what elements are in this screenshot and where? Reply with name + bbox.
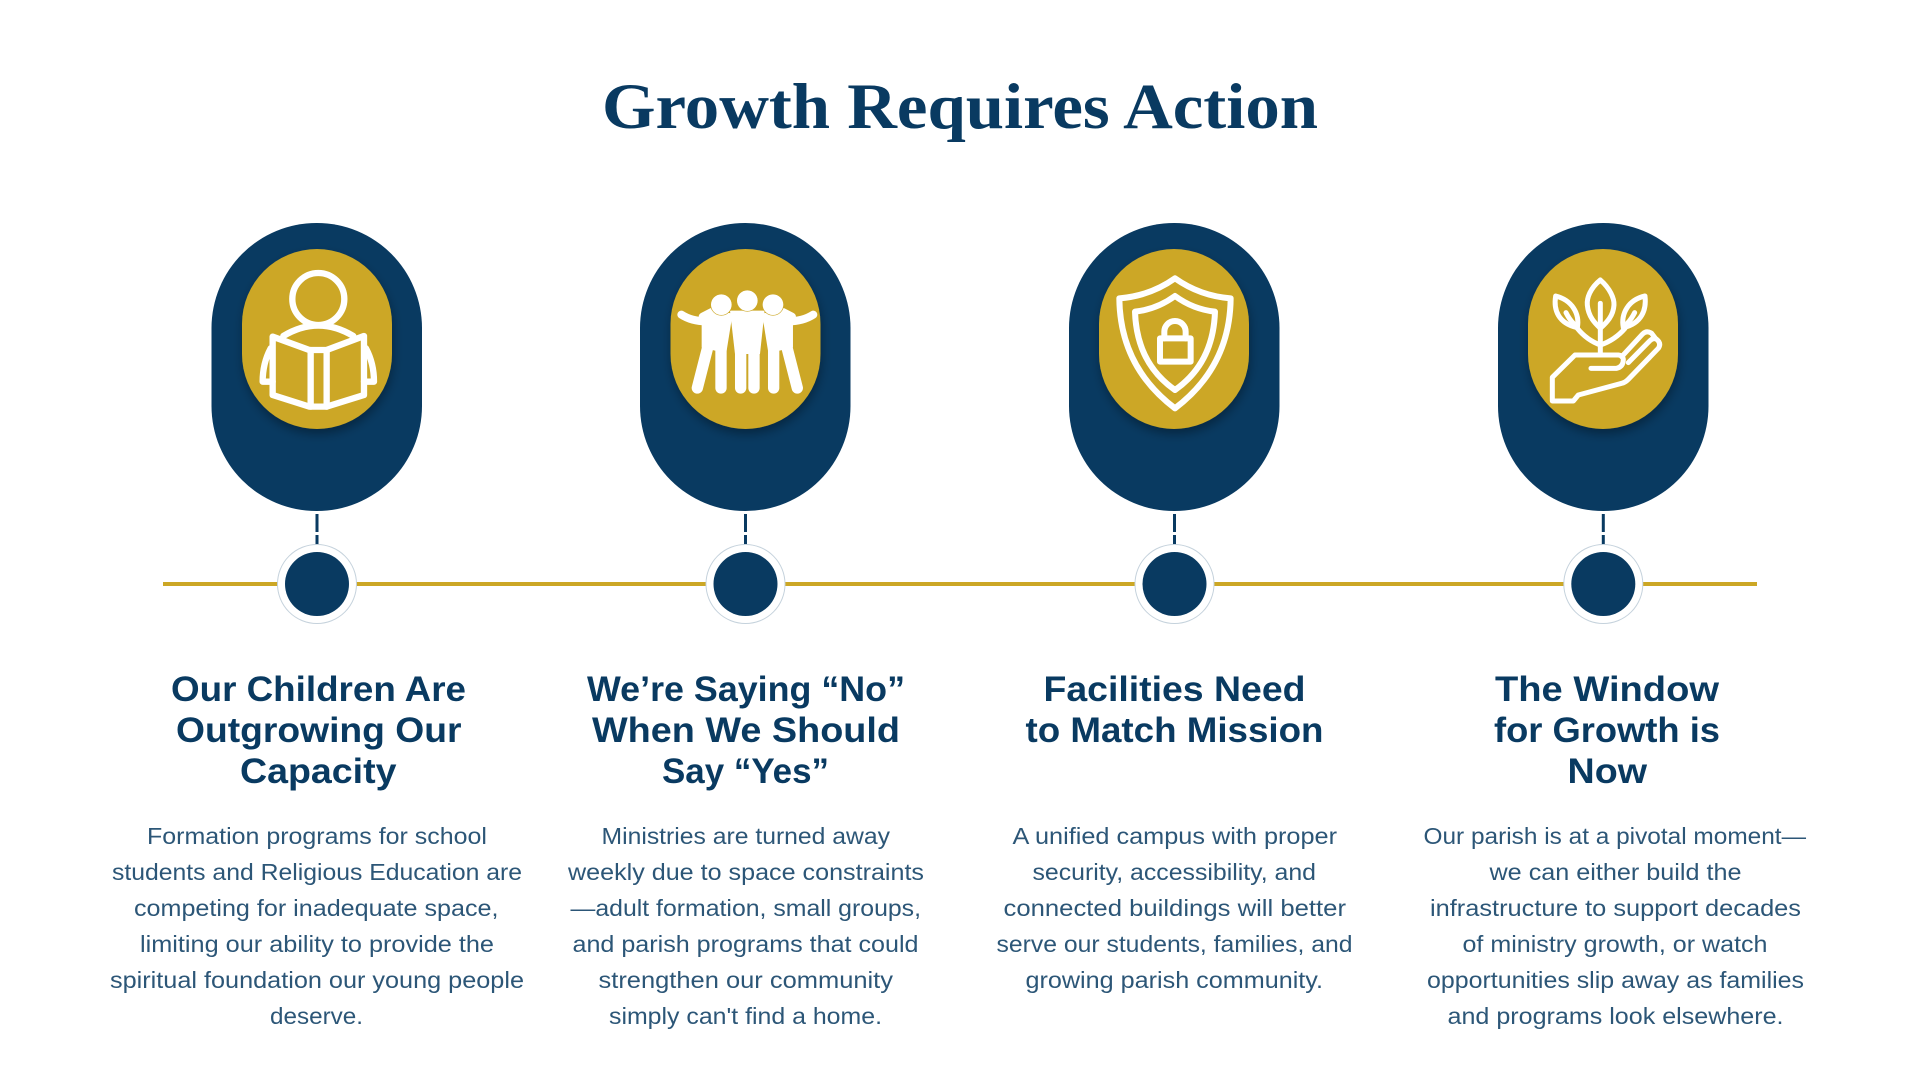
- heading 4: [1494, 670, 1720, 791]
- timeline node 2: [706, 544, 785, 624]
- navy pill 4: [1498, 223, 1708, 511]
- heading 2: [587, 670, 905, 791]
- timeline line: [163, 582, 1757, 586]
- navy pill 1: [212, 223, 422, 511]
- body text 3: A unified campus with proper: [1012, 823, 1337, 849]
- body text 3: growing parish community.: [1026, 967, 1323, 993]
- icon: three people embracing: [681, 290, 813, 388]
- dashed connector 2: [744, 514, 747, 545]
- navy pill 2: [640, 223, 850, 511]
- navy pill 3: [1069, 223, 1280, 511]
- body text 4: Our parish is at a pivotal moment—: [1424, 823, 1806, 849]
- timeline node 4: [1564, 544, 1643, 624]
- heading 1: [171, 670, 466, 791]
- step 2: saying no: [567, 223, 924, 1029]
- body text 1: Formation programs for school: [147, 823, 487, 849]
- gold badge 4: [1528, 249, 1678, 429]
- icon: hand holding plant: [1552, 280, 1660, 401]
- heading 2: We’re Saying “No”: [587, 670, 905, 709]
- heading 1: Capacity: [240, 752, 397, 791]
- body text 4: opportunities slip away as families: [1427, 967, 1804, 993]
- heading 3: Facilities Need: [1044, 670, 1306, 709]
- step 4: window for growth: [1424, 223, 1806, 1029]
- body text 4: we can either build the: [1488, 859, 1742, 885]
- heading 2: Say “Yes”: [662, 752, 829, 791]
- heading 3: [1026, 670, 1324, 750]
- heading 3: to Match Mission: [1026, 711, 1324, 750]
- body text 3: serve our students, families, and: [996, 931, 1352, 957]
- body text 1: limiting our ability to provide the: [140, 931, 494, 957]
- heading 4: The Window: [1495, 670, 1720, 709]
- heading 4: for Growth is: [1494, 711, 1720, 750]
- timeline node 3: [1135, 544, 1214, 624]
- dashed connector 3: [1173, 514, 1176, 545]
- heading 1: Our Children Are: [171, 670, 466, 709]
- heading 1: Outgrowing Our: [176, 711, 462, 750]
- body text 2: [567, 823, 924, 1029]
- body text 4: infrastructure to support decades: [1430, 895, 1801, 921]
- heading 4: Now: [1568, 752, 1648, 791]
- body text 1: students and Religious Education are: [112, 859, 522, 885]
- step 3: facilities: [996, 223, 1352, 993]
- body text 1: [110, 823, 524, 1029]
- body text 2: Ministries are turned away: [602, 823, 891, 849]
- body text 2: simply can't find a home.: [609, 1003, 882, 1029]
- body text 3: connected buildings will better: [1004, 895, 1346, 921]
- body text 4: of ministry growth, or watch: [1462, 931, 1768, 957]
- heading 2: When We Should: [592, 711, 900, 750]
- body text 2: and parish programs that could: [572, 931, 918, 957]
- body text 3: [996, 823, 1352, 993]
- body text 2: weekly due to space constraints: [567, 859, 924, 885]
- body text 4: [1424, 823, 1806, 1029]
- body text 4: and programs look elsewhere.: [1448, 1003, 1784, 1029]
- gold badge 2: [670, 249, 820, 429]
- dashed connector 4: [1602, 514, 1605, 545]
- gold badge 1: [242, 249, 392, 429]
- title: Growth Requires Action: [602, 71, 1318, 143]
- step 1: children: [110, 223, 524, 1029]
- body text 2: —adult formation, small groups,: [570, 895, 921, 921]
- dashed connector 1: [316, 514, 318, 545]
- body text 1: competing for inadequate space,: [134, 895, 498, 921]
- body text 1: deserve.: [270, 1003, 363, 1029]
- icon: shield with lock: [1119, 278, 1231, 408]
- icon: person reading book: [263, 273, 374, 407]
- timeline node 1: [278, 544, 356, 624]
- body text 1: spiritual foundation our young people: [110, 967, 524, 993]
- gold badge 3: [1099, 249, 1249, 429]
- body text 2: strengthen our community: [598, 967, 894, 993]
- body text 3: security, accessibility, and: [1032, 859, 1316, 885]
